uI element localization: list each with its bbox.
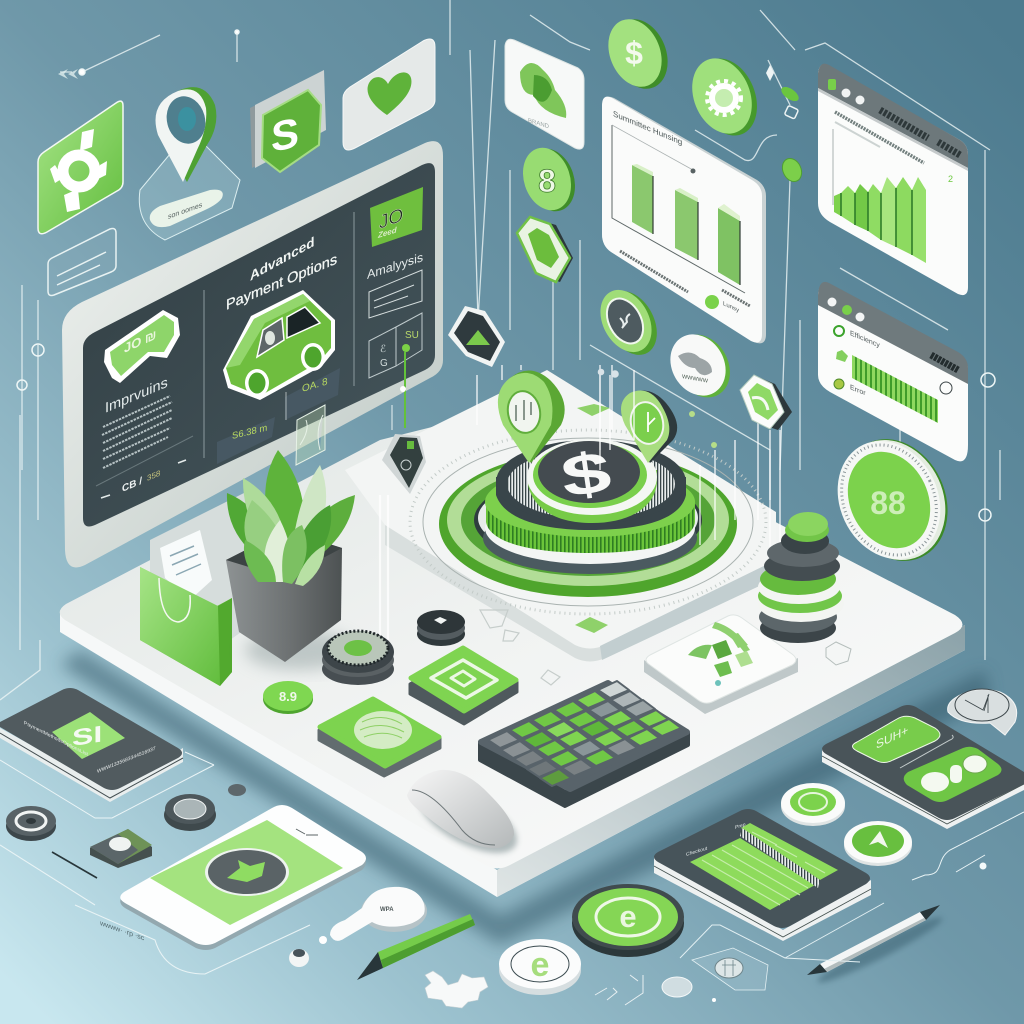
right coin stack [758, 512, 844, 643]
floating chip 6 [382, 434, 426, 494]
car windows [287, 307, 320, 338]
hexagon glass icon [692, 948, 768, 990]
green top tier [528, 470, 657, 523]
small lock and pill [766, 65, 805, 185]
green tile 1 [410, 648, 517, 724]
badge: amount: S6.38 m [232, 423, 267, 442]
floating chip 4 [659, 324, 741, 408]
big green coin: 88 [870, 485, 906, 521]
card: dark stack with green S: SI [72, 721, 102, 751]
card: leaf icon: BRAND [528, 117, 550, 130]
connector lines [0, 0, 1000, 700]
card: dark stack with green S: WWW1335683344516937 [97, 746, 156, 775]
small glyph doodles [595, 975, 643, 1005]
card: outline list [48, 228, 116, 296]
small chip stack [417, 610, 465, 646]
text block [102, 396, 172, 468]
heading: improvuins: Imprvuins [105, 374, 168, 417]
icon tile: green gear [38, 101, 123, 234]
card: green table: Prep [735, 822, 746, 831]
outline tiles [369, 313, 422, 378]
panel: browser window with progress [818, 282, 968, 461]
floating chip 5 [740, 375, 792, 430]
map pin left [498, 370, 565, 463]
pot shadow [245, 630, 355, 670]
panel: bar chart card: Lunsy [723, 300, 740, 314]
green badge: JO: Zeed [377, 225, 398, 240]
bar 2 [675, 188, 698, 260]
icon tile: shield with dollar [250, 70, 326, 172]
card: dual green buttons [822, 705, 1024, 829]
green base ring [439, 451, 737, 597]
tile: small grey green [90, 829, 152, 868]
dark ribbed tier [496, 477, 686, 530]
coin: tiny [228, 784, 246, 796]
small caption text: wwww· ·rp ·sc [99, 918, 145, 943]
row 3 [834, 379, 844, 389]
desk shadow [60, 650, 990, 945]
card: green table: Checkout [686, 846, 708, 858]
card: dark stack with green S [0, 688, 183, 802]
ribbed green tier [486, 500, 695, 553]
dollar sign: $ [557, 438, 615, 510]
line sketches on desk [480, 610, 560, 685]
small white button [289, 949, 309, 967]
small green logos on platform [575, 404, 610, 633]
raised platform [345, 370, 776, 662]
dark lower tier [483, 502, 697, 574]
browser header [818, 64, 968, 168]
keyboard [480, 681, 688, 806]
floating chip 4: WWWWW [682, 374, 709, 385]
icon: green car [223, 290, 335, 400]
green tile 2 [319, 699, 440, 776]
outer tick rings [410, 430, 766, 614]
vertical light beams [380, 365, 780, 640]
card: heart [343, 39, 435, 150]
black stroke [52, 852, 97, 878]
table connector outline [680, 903, 884, 962]
card: leaf icon [505, 39, 584, 149]
coin: dollar top [599, 11, 678, 97]
white pen [807, 905, 946, 989]
footer label: 358 [147, 468, 161, 483]
glass outline tag [296, 405, 325, 465]
coin: dollar top: $ [625, 35, 643, 71]
phone screen [150, 820, 343, 925]
glass outline around card [0, 752, 214, 818]
keys [488, 681, 681, 786]
green badge: JO [370, 187, 423, 247]
badge: speech bubble: JO ₪ [124, 327, 156, 356]
card: dark stack with green S: PaymentMethodsOptionsList [24, 720, 88, 758]
dot [712, 998, 716, 1002]
coin: swirl green [781, 783, 845, 826]
connector nodes [17, 30, 995, 521]
chip stack [322, 631, 394, 685]
small shopping bag [140, 530, 232, 686]
rosette doodle [662, 977, 692, 997]
icon: map pin on glass plate [139, 87, 240, 240]
potted plant [226, 450, 355, 670]
map pin right [621, 391, 677, 463]
floating chip 1 [517, 217, 573, 282]
panel: browser window with bars: 2 [948, 174, 953, 184]
card: green table [654, 809, 871, 941]
dark dollar disc [538, 441, 640, 503]
pencil green [357, 914, 475, 980]
monitor screen [83, 163, 435, 526]
browser caption [835, 112, 924, 163]
white coin e [499, 939, 581, 995]
speech bubble icon [948, 689, 1017, 735]
phone [120, 805, 366, 950]
receipt [160, 530, 212, 600]
chart axes [612, 125, 745, 293]
puzzle piece cluster [425, 971, 488, 1008]
big dark coin with green center [572, 884, 684, 957]
bar 3 [718, 204, 740, 285]
row 1 [834, 326, 844, 336]
badge: speech bubble [104, 310, 180, 383]
decorative outline line [0, 845, 310, 974]
squiggle connector [912, 812, 1024, 880]
tile labels: ℰ [380, 344, 386, 355]
coin: target [6, 806, 56, 841]
screen dividers [204, 212, 354, 458]
big green coin [819, 422, 967, 578]
tile labels: G [380, 358, 388, 369]
panel: browser window with progress: Efficiency [850, 328, 880, 350]
chart caption [620, 251, 688, 292]
button green pill [852, 716, 940, 762]
key shaped tag [319, 887, 427, 944]
green token: 8.9 [279, 689, 297, 704]
panel: browser window with bars [818, 64, 968, 295]
outline box [369, 270, 422, 318]
coin: arrow green [844, 821, 912, 866]
pot [226, 530, 342, 662]
header [818, 282, 968, 384]
car wheels [245, 369, 269, 397]
monitor stand [150, 490, 300, 640]
connector node [980, 862, 986, 870]
badge: amount: OA. 8 [302, 376, 328, 395]
floating chip 3 [590, 281, 667, 364]
floating chip 2 [448, 306, 505, 367]
coin: dark chip [164, 794, 216, 831]
icon: arrows [58, 69, 78, 79]
big dark coin with green center: e [619, 899, 637, 934]
monitor [62, 141, 443, 567]
tag icon on desk [826, 642, 851, 665]
concentric dollar stack [410, 430, 766, 614]
tile labels [380, 330, 419, 369]
green hanging connector [392, 344, 410, 430]
coin: gear top [681, 49, 768, 145]
heading: advanced payment options: Payment Options [226, 251, 338, 314]
chart title: Summittec Hunsing [613, 108, 683, 147]
tile labels: SU [405, 330, 419, 341]
table green area [690, 838, 815, 910]
coin: mid green: 8 [538, 163, 556, 199]
green token [263, 681, 313, 714]
row 2 progress bar [836, 350, 848, 362]
green badge: JO: JO [379, 204, 403, 234]
badge: amount [217, 368, 340, 464]
button with icons [904, 747, 1002, 802]
button green pill: SUH+ [876, 723, 908, 752]
footer label [101, 460, 186, 498]
footer label: CB / [122, 476, 142, 495]
icon tile: shield with dollar: S [271, 109, 299, 161]
key shaped tag: WPA [380, 907, 394, 913]
heading: advanced payment options: Advanced [250, 234, 314, 285]
coin: mid green [515, 141, 583, 218]
panel: bar chart card [602, 97, 766, 343]
phone circle icon [205, 848, 289, 896]
white coin e: e [531, 946, 549, 984]
desk platform [60, 400, 965, 897]
heading: analysis: Amalyysis [367, 249, 423, 282]
leaves [227, 450, 355, 586]
bar chart [834, 177, 926, 263]
bar 1 [632, 164, 653, 234]
stacked card with green pattern [644, 615, 798, 714]
panel: browser window with progress: Error [850, 382, 866, 398]
icon: map pin on glass plate: son oomes [168, 200, 203, 221]
mouse [407, 770, 527, 867]
